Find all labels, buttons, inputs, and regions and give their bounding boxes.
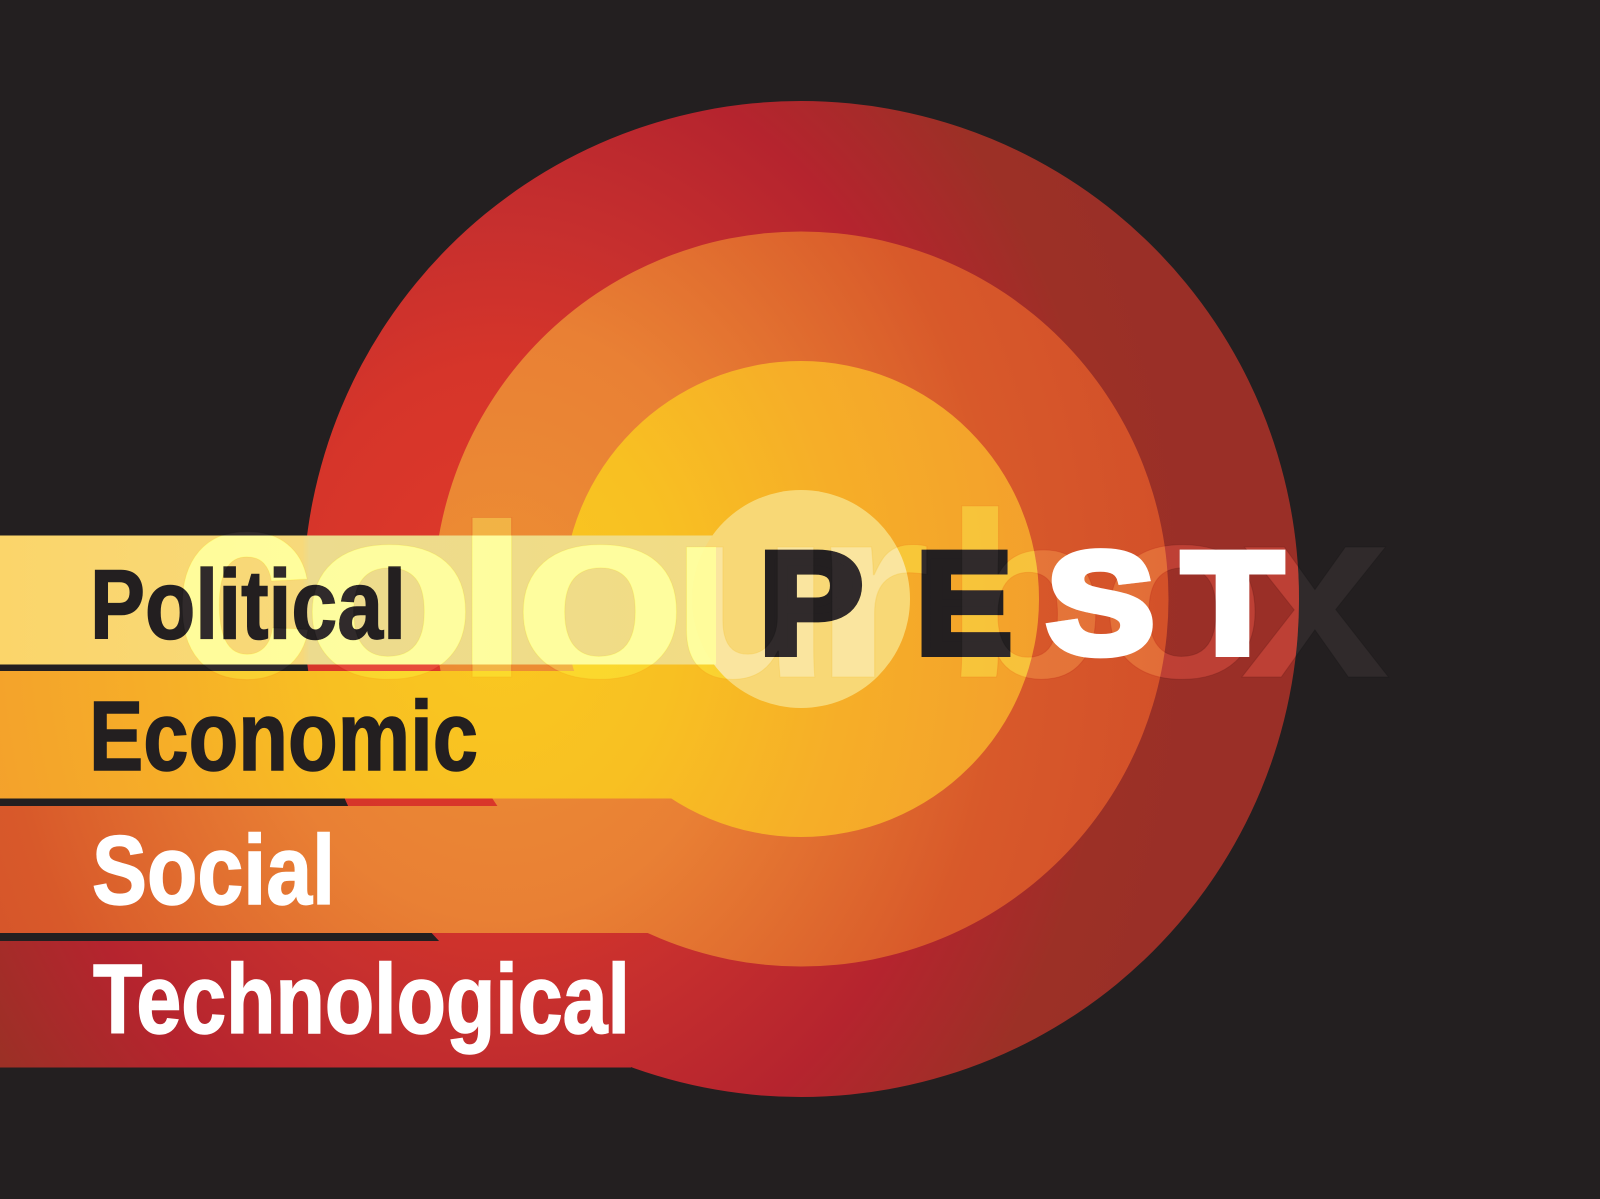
label: Economic: Economic	[89, 681, 478, 791]
band: social	[0, 806, 650, 933]
second circle: social	[434, 232, 1168, 966]
title: PEST	[760, 524, 1282, 684]
watermark: colourbox: u	[670, 455, 832, 730]
watermark: colourbox: c	[172, 434, 316, 735]
band: political	[0, 536, 716, 664]
watermark: colourbox: l	[452, 479, 532, 724]
watermark: colourbox: o	[512, 455, 688, 729]
label: Political: Political	[90, 550, 406, 660]
band: economic	[0, 671, 674, 798]
watermark: colourbox	[172, 434, 1392, 735]
outer circle: technological	[303, 101, 1299, 1097]
watermark highlight on political band: o	[512, 455, 688, 729]
watermark: colourbox: o	[1099, 455, 1266, 730]
label: Social: Social	[92, 815, 335, 925]
concentric circles	[303, 101, 1299, 1097]
watermark highlight on political band: l	[452, 479, 532, 724]
watermark: colourbox: r	[810, 454, 932, 729]
third circle: economic	[563, 361, 1039, 837]
band: technological	[0, 941, 631, 1068]
watermark highlight on political band	[184, 536, 716, 664]
letter P: P	[760, 524, 862, 684]
infographic: PEST concentric circles	[0, 101, 1387, 1097]
watermark: colourbox: o	[301, 455, 477, 729]
category labels	[89, 550, 630, 1054]
letter S: S	[1047, 524, 1154, 684]
watermark highlight on political band: c	[172, 434, 316, 735]
label: Technological: Technological	[93, 944, 630, 1054]
watermark: colourbox: x	[1240, 454, 1392, 729]
watermark highlight on political band: u	[670, 455, 832, 730]
watermark: colourbox: b	[943, 463, 1107, 727]
letter T: T	[1183, 524, 1282, 684]
inner circle: political	[692, 490, 910, 708]
letter E: E	[916, 524, 1012, 684]
watermark highlight on political band: o	[301, 455, 477, 729]
